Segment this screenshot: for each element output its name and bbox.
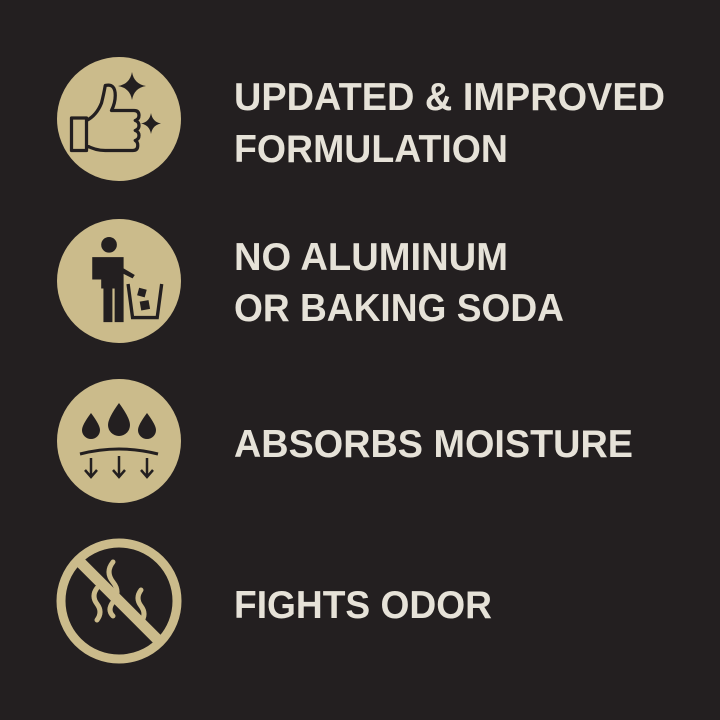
icon: person with trash bin xyxy=(57,219,181,343)
text: no aluminum or baking soda: OR BAKING SODA xyxy=(234,287,564,330)
icon: thumbs up with sparkles xyxy=(57,57,181,181)
text: updated & improved formulation xyxy=(234,76,665,171)
text: updated & improved formulation: UPDATED & IMPROVED xyxy=(234,76,665,119)
text: fights odor: FIGHTS ODOR xyxy=(234,584,492,627)
text: absorbs moisture: ABSORBS MOISTURE xyxy=(234,423,633,466)
text: no aluminum or baking soda xyxy=(234,236,564,330)
icon: no odor xyxy=(61,543,177,659)
icon: droplets absorbing xyxy=(57,379,181,503)
text: no aluminum or baking soda: NO ALUMINUM xyxy=(234,236,508,279)
text: updated & improved formulation: FORMULATION xyxy=(234,128,508,171)
